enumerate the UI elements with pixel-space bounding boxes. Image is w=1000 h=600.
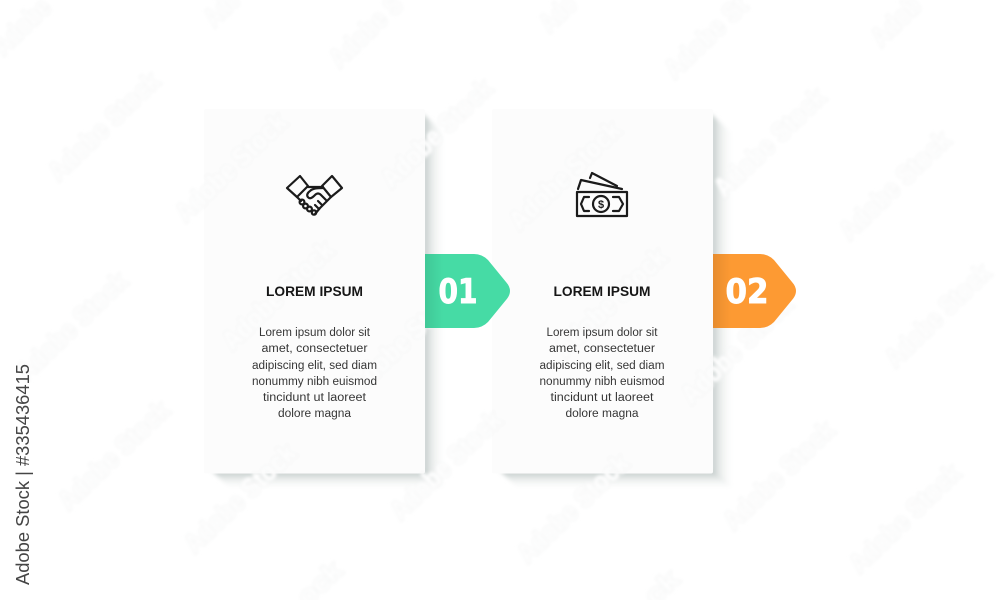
text block: card 1 body: Lorem ipsum dolor sit — [259, 327, 371, 339]
watermark pattern: Adobe Stock — [10, 265, 134, 387]
badge 01: 01 — [438, 272, 478, 312]
badge 02 — [713, 254, 796, 328]
watermark pattern: Adobe Stock — [216, 234, 340, 356]
watermark pattern: Adobe Stock — [549, 241, 673, 363]
panel: card 2 — [492, 109, 713, 474]
text block: card 1 body: tincidunt ut laoreet — [263, 392, 367, 404]
text block: card 1 body — [252, 327, 377, 420]
watermark pattern: Adobe Stock — [675, 288, 799, 410]
watermark pattern: Adobe Stock — [708, 81, 832, 203]
stock id label: Adobe Stock | #335436415 — [13, 364, 33, 585]
heading: card 2: LOREM IPSUM — [554, 284, 650, 299]
text block: card 1 body: nonummy nibh euismod — [252, 376, 377, 388]
text block: card 1 body: dolore magna — [278, 408, 352, 420]
watermark pattern: Adobe Stock — [843, 457, 967, 579]
watermark pattern: Adobe Stock — [503, 114, 627, 236]
watermark pattern: Adobe Stock — [384, 404, 508, 526]
icon: handshake — [287, 176, 342, 215]
watermark pattern: Adobe Stock — [717, 414, 841, 536]
watermark pattern: Adobe Stock — [511, 447, 635, 569]
watermark pattern: Adobe Stock — [343, 278, 467, 400]
badge 02: 02 — [726, 272, 768, 312]
watermark pattern: Adobe Stock — [178, 437, 302, 559]
text block: card 1 body: adipiscing elit, sed diam — [252, 360, 377, 372]
text block: card 2 body: nonummy nibh euismod — [540, 376, 664, 388]
text block: card 2 body: Lorem ipsum dolor sit — [546, 327, 658, 339]
icon: banknotes: $ — [598, 199, 604, 211]
watermark pattern: Adobe Stock — [833, 124, 957, 246]
text block: card 2 body: dolore magna — [566, 408, 639, 420]
heading: card 1: LOREM IPSUM — [266, 284, 363, 299]
watermark pattern: Adobe Stock — [42, 65, 166, 187]
card shadows — [212, 114, 735, 490]
text block: card 1 body: amet, consectetuer — [262, 343, 368, 355]
watermark pattern: Adobe Stock — [52, 394, 176, 516]
watermark pattern: Adobe Stock — [169, 106, 293, 228]
icon: banknotes — [577, 173, 627, 216]
text block: card 2 body: tincidunt ut laoreet — [550, 392, 654, 404]
watermark pattern: Adobe Stock — [375, 72, 499, 194]
text block: card 2 body: amet, consectetuer — [549, 343, 655, 355]
text block: card 2 body: adipiscing elit, sed diam — [540, 360, 664, 372]
badge 01 — [425, 254, 510, 328]
text block: card 2 body — [540, 327, 664, 420]
panel: card 1 — [204, 109, 425, 474]
